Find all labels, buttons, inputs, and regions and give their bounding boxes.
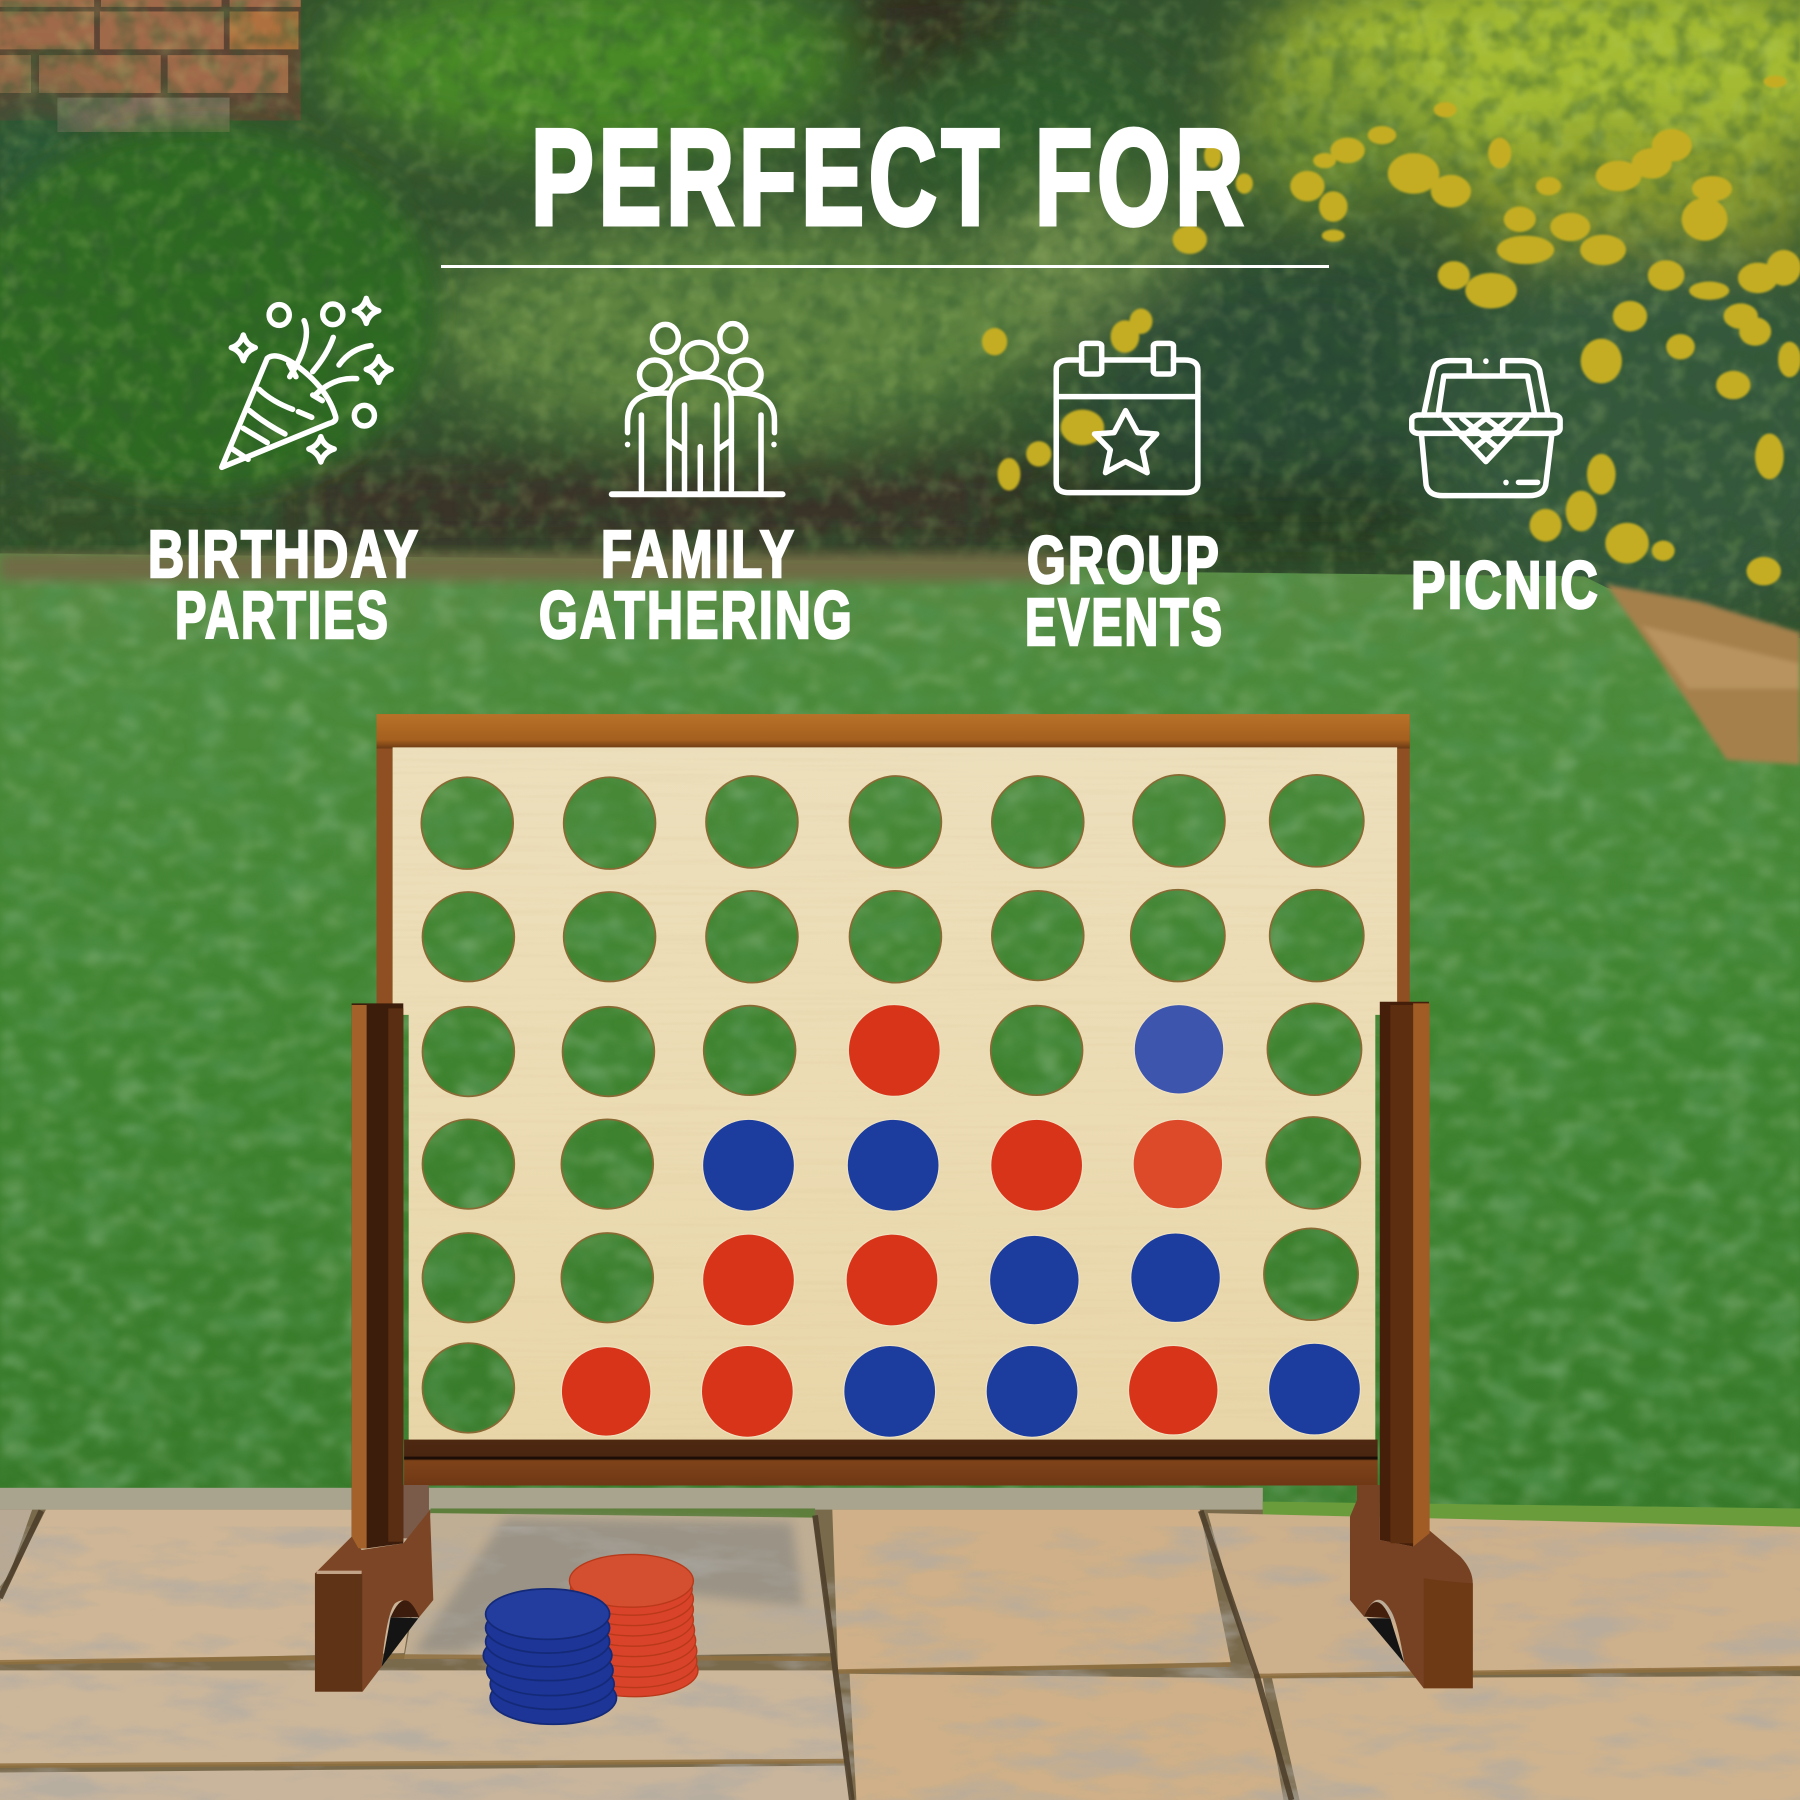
label: birthday parties: BIRTHDAY <box>148 517 420 592</box>
yellow flowers <box>982 75 1800 585</box>
label: group events <box>1025 523 1224 660</box>
label: family gathering: FAMILY <box>601 517 796 592</box>
stone patio <box>0 1488 1800 1800</box>
connect four game <box>377 714 1410 1486</box>
upper wooden frame <box>377 714 1410 1015</box>
icon: family group <box>612 324 783 494</box>
garden path at right <box>1606 584 1800 765</box>
label: group events: EVENTS <box>1025 585 1224 660</box>
title underline <box>441 265 1329 268</box>
label: family gathering <box>539 517 854 653</box>
blue discs <box>703 1004 1360 1437</box>
left post and foot <box>315 1003 433 1692</box>
label: family gathering: GATHERING <box>539 578 854 653</box>
garden foliage backdrop <box>0 0 1800 654</box>
bottom rail <box>404 1440 1378 1486</box>
right post and foot <box>1350 1002 1473 1688</box>
stack of red discs <box>569 1554 698 1697</box>
label: picnic: PICNIC <box>1411 548 1600 623</box>
plywood board with holes <box>393 747 1397 1442</box>
lawn <box>0 540 1800 1533</box>
title: PERFECT FOR <box>531 101 1248 253</box>
icon: party popper <box>222 298 391 467</box>
label: birthday parties <box>148 517 420 653</box>
round hedge <box>0 126 436 494</box>
brick wall <box>0 0 301 132</box>
label: group events: GROUP <box>1027 523 1221 598</box>
tan edging strip <box>0 553 1068 581</box>
icon: picnic basket <box>1412 361 1560 496</box>
red discs <box>561 1004 1223 1437</box>
icon: calendar with star <box>1056 343 1198 493</box>
hole rims <box>421 775 1364 1433</box>
stack of blue discs <box>483 1589 616 1724</box>
label: birthday parties: PARTIES <box>175 578 390 653</box>
